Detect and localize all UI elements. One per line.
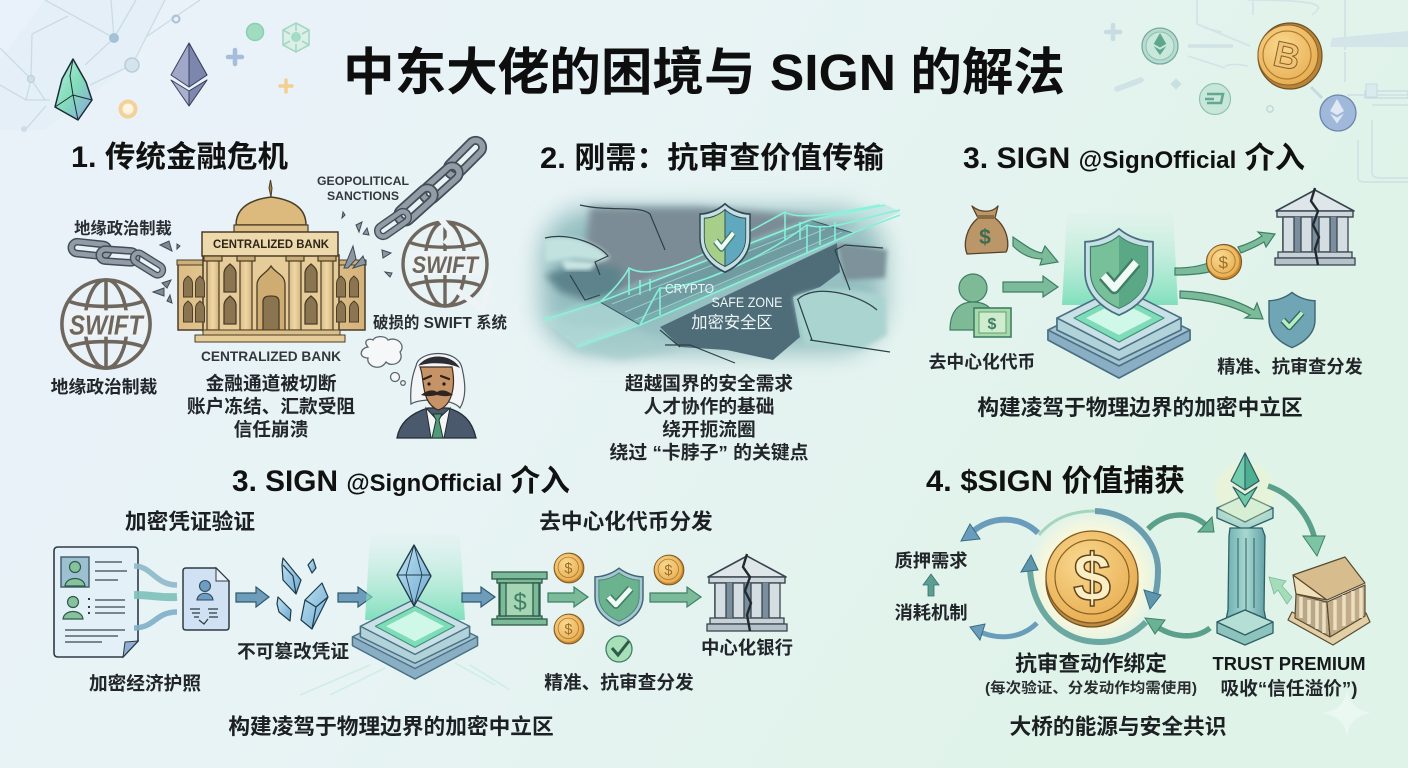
icon: hexagon — [283, 23, 309, 52]
icon: green vault: $ — [513, 589, 527, 616]
icon: user with banknote: $ — [988, 316, 997, 333]
label: geopolitical sanctions — [317, 174, 409, 203]
label: broken SWIFT: 破损的 SWIFT 系统 — [373, 313, 507, 332]
icon: lower platform — [300, 599, 510, 695]
label: action binding: 抗审查动作绑定 — [1015, 651, 1167, 676]
icon: cracked bank — [707, 554, 787, 631]
icon: money bag — [965, 206, 1008, 254]
label: precise distribution: 精准、抗审查分发 — [544, 672, 694, 693]
icon: ethereum coin — [1142, 28, 1178, 64]
icon: flow bands — [134, 566, 177, 628]
icon: crypto passport document — [54, 547, 138, 657]
label: sanctions upper: 地缘政治制裁 — [74, 220, 172, 238]
icon: central bank building — [177, 180, 366, 342]
arrow: bag to platform — [1013, 237, 1058, 265]
text: security needs — [610, 373, 809, 463]
icon: broken SWIFT globe: SWIFT — [412, 252, 480, 279]
icon: dash coin — [1200, 84, 1230, 114]
label: burn mechanism: 消耗机制 — [894, 602, 968, 623]
icon: green vault — [492, 572, 547, 625]
icon: right broken chain — [342, 137, 486, 277]
icon: sparkle watermark — [1323, 690, 1371, 736]
icon: broken SWIFT globe — [403, 218, 491, 309]
icon: dollar coin: $ — [1073, 540, 1111, 616]
icon: light plus — [1106, 25, 1120, 39]
icon: worried man — [397, 354, 476, 438]
label: centralized bank: 中心化银行 — [701, 637, 793, 658]
caption: 构建凌驾于物理边界的加密中立区 — [977, 395, 1303, 420]
label: staking demand: 质押需求 — [894, 550, 968, 571]
arrow: coin to pillar — [1148, 515, 1214, 532]
label: crypto: CRYPTO — [665, 281, 714, 296]
decoration: top-right coins and circuit lines — [1106, 0, 1408, 182]
arrow: to coin — [1175, 263, 1209, 275]
arrow: platform to vault — [462, 587, 495, 607]
arrow: burn up to staking — [923, 574, 939, 596]
panel: SIGN value capture — [894, 453, 1370, 739]
icon: blue crystal — [397, 545, 431, 606]
icon: green shield — [1085, 229, 1153, 315]
arrow: credential to crystals — [236, 587, 269, 607]
icon: ethereum — [171, 43, 207, 106]
label: geopolitical sanctions: GEOPOLITICAL — [317, 174, 409, 188]
decoration: top-left network and crypto icons — [0, 0, 309, 132]
icon: cracked bank — [1275, 188, 1355, 265]
label: geopolitical sanctions: SANCTIONS — [327, 189, 399, 203]
icon: shield — [700, 204, 750, 272]
label: bank plate: CENTRALIZED BANK — [213, 237, 329, 251]
heading 2: 2. 刚需：抗审查价值传输 — [540, 142, 884, 175]
heading 4: 4. $SIGN 价值捕获 — [926, 465, 1185, 498]
icon: green dot — [246, 24, 264, 40]
title: 中东大佬的困境与 SIGN 的解法 — [343, 44, 1065, 101]
label: precise distribution: 精准、抗审查分发 — [1217, 356, 1363, 377]
icon: coin — [1206, 244, 1242, 280]
icon: money bag: $ — [979, 226, 991, 249]
label: decentralized token: 去中心化代币 — [929, 351, 1035, 372]
text: security needs: 人才协作的基础 — [644, 396, 774, 417]
arrow: coin to bank — [1238, 232, 1275, 253]
icon: SWIFT globe: SWIFT — [69, 309, 145, 341]
label: safe zone: SAFE ZONE — [712, 294, 782, 310]
arrow: outer rings — [1021, 511, 1161, 642]
label: crypto safe zone: 加密安全区 — [691, 314, 773, 332]
label: sanctions lower: 地缘政治制裁 — [51, 377, 158, 397]
label: trust premium: TRUST PREMIUM — [1212, 654, 1366, 674]
icon: SWIFT globe — [62, 280, 150, 368]
icon: glowing beam — [1062, 213, 1178, 305]
icon: ethereum crystal — [1215, 453, 1275, 522]
icon: platform — [1048, 287, 1190, 378]
text: consequences: 信任崩溃 — [234, 419, 308, 440]
text: consequences — [187, 373, 355, 440]
arrow: bank to pillar — [1269, 577, 1292, 604]
icon: dollar coin — [1046, 531, 1138, 627]
arrow: coin to staking — [961, 520, 1038, 541]
text: security needs: 超越国界的安全需求 — [625, 373, 793, 394]
label: crypto passport: 加密经济护照 — [89, 673, 201, 694]
label: immutable credential: 不可篡改凭证 — [237, 641, 349, 662]
icon: user with banknote — [950, 274, 1011, 337]
text: security needs: 绕过 “卡脖子” 的关键点 — [610, 442, 809, 463]
arrow: shield to bank — [650, 587, 701, 607]
panel: censorship resistant value transfer — [540, 142, 900, 463]
icon: blue plus — [228, 50, 242, 64]
icon: crystal gem — [55, 59, 92, 120]
icon: left broken chain — [71, 241, 180, 303]
icon: blue ethereum coin — [1320, 95, 1356, 131]
icon: shield — [595, 568, 643, 626]
icon: orange plus — [280, 80, 292, 92]
caption: 大桥的能源与安全共识 — [1010, 714, 1226, 739]
arrow: pillar to bank — [1268, 486, 1325, 556]
text: security needs: 绕开扼流圈 — [662, 419, 756, 440]
panel: traditional finance crisis — [51, 137, 507, 440]
caption: 构建凌驾于物理边界的加密中立区 — [228, 714, 554, 739]
icon: crystal shards — [277, 558, 328, 629]
icon: beam — [365, 535, 465, 620]
arrow: user to platform — [1003, 276, 1058, 297]
heading 1: 1. 传统金融危机 — [71, 141, 288, 174]
label: token distribution: 去中心化代币分发 — [539, 509, 713, 534]
icon: bitcoin coin — [1258, 23, 1322, 89]
text: consequences: 账户冻结、汇款受阻 — [187, 396, 355, 417]
heading 3 lower: 3. SIGN @SignOfficial 介入 — [232, 465, 570, 498]
icon: small shield — [1269, 292, 1315, 348]
arrow: crystals to platform — [338, 587, 372, 607]
label: credential verification: 加密凭证验证 — [125, 509, 255, 534]
panel: SIGN intervenes bottom — [54, 465, 793, 739]
arrow: to small shield — [1180, 291, 1263, 319]
arrow: pillar to coin — [1145, 618, 1210, 636]
text: consequences: 金融通道被切断 — [206, 373, 337, 394]
icon: orange ring — [120, 102, 136, 116]
icon: pillar — [1217, 495, 1273, 645]
label: usage note: (每次验证、分发动作均需使用) — [985, 679, 1197, 697]
icon: credential card — [183, 568, 229, 630]
label: centralized bank: CENTRALIZED BANK — [201, 348, 341, 364]
icon: coin halo — [1026, 512, 1158, 644]
illustration: crypto bridge over canyon — [540, 204, 900, 363]
icon: coins — [554, 553, 684, 644]
icon: thought cloud — [361, 337, 405, 385]
heading 3: 3. SIGN @SignOfficial 介入 — [963, 142, 1305, 175]
arrow: vault to shield — [548, 587, 588, 607]
icon: check badge — [606, 636, 632, 662]
icon: golden temple — [1288, 557, 1370, 645]
icon: bitcoin coin: B — [1270, 33, 1304, 78]
panel: SIGN intervenes top — [929, 142, 1363, 420]
label: absorb premium: 吸收“信任溢价”) — [1220, 678, 1358, 699]
arrow: coin to burn — [970, 623, 1037, 640]
